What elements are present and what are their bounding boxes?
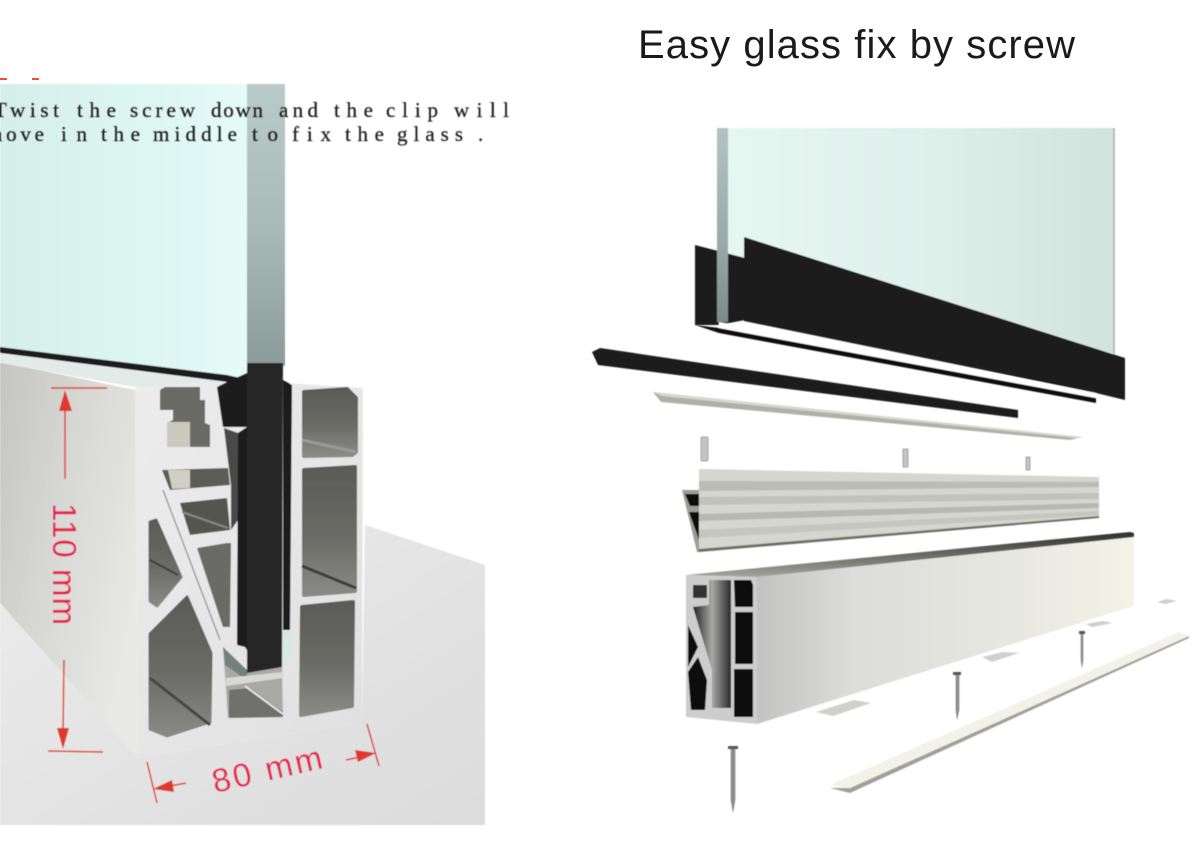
extrusion side face bbox=[0, 362, 138, 758]
white gap line bbox=[719, 322, 1096, 398]
dimension: 110 mm bbox=[46, 388, 107, 752]
glass vertical edge bbox=[717, 128, 728, 322]
lower black gasket lip bbox=[695, 325, 1096, 403]
rear black gasket bbox=[695, 245, 745, 325]
instruction text: . bbox=[478, 122, 483, 146]
instruction text: the bbox=[345, 122, 384, 146]
instruction text: screw bbox=[130, 98, 196, 122]
glass right edge bbox=[1113, 128, 1115, 354]
glass panel bbox=[0, 84, 247, 380]
black glass shoe and gaskets bbox=[217, 363, 292, 673]
extrusion top cover bbox=[0, 353, 227, 388]
floor surface bbox=[0, 525, 485, 825]
instruction text: the bbox=[334, 98, 373, 122]
pins bbox=[701, 437, 1030, 470]
instruction text: in bbox=[61, 122, 88, 146]
left illustration: assembled profile with glass bbox=[0, 84, 485, 825]
black gasket strip under glass bbox=[0, 347, 240, 384]
instruction text: the bbox=[101, 122, 140, 146]
glass panel bbox=[728, 128, 1114, 354]
black rubber strip bbox=[592, 348, 1018, 418]
main extrusion bbox=[686, 532, 1134, 724]
extrusion front face bbox=[135, 382, 363, 758]
instruction text: clip bbox=[386, 98, 438, 122]
long base strip bbox=[830, 632, 1189, 793]
instruction text: down bbox=[211, 98, 264, 122]
striped clamp profile bbox=[682, 469, 1099, 552]
screws bbox=[728, 631, 1085, 812]
instruction text: to bbox=[252, 122, 278, 146]
title: Easy glass fix by screw bbox=[638, 23, 1075, 67]
bottom channel with clip bbox=[223, 630, 290, 718]
instruction text bbox=[0, 98, 509, 146]
front black gasket bbox=[744, 237, 1125, 400]
dimension: 80 mm: 80 mm bbox=[208, 739, 326, 800]
red dash marks bbox=[0, 78, 39, 80]
dimension: 80 mm bbox=[147, 724, 379, 803]
instruction text: fix bbox=[292, 122, 332, 146]
instruction text: glass bbox=[397, 122, 463, 146]
grey clip strip bbox=[653, 392, 1082, 440]
instruction text: middle bbox=[153, 122, 237, 146]
profile chambers bbox=[150, 387, 356, 736]
glass edge bbox=[247, 84, 285, 366]
right illustration: exploded view bbox=[592, 128, 1189, 812]
mounting plates bbox=[816, 599, 1177, 716]
instruction text: and bbox=[279, 98, 318, 122]
instruction text: the bbox=[77, 98, 116, 122]
instruction text: will bbox=[454, 98, 509, 122]
dimension: 110 mm: 110 mm bbox=[46, 503, 83, 625]
